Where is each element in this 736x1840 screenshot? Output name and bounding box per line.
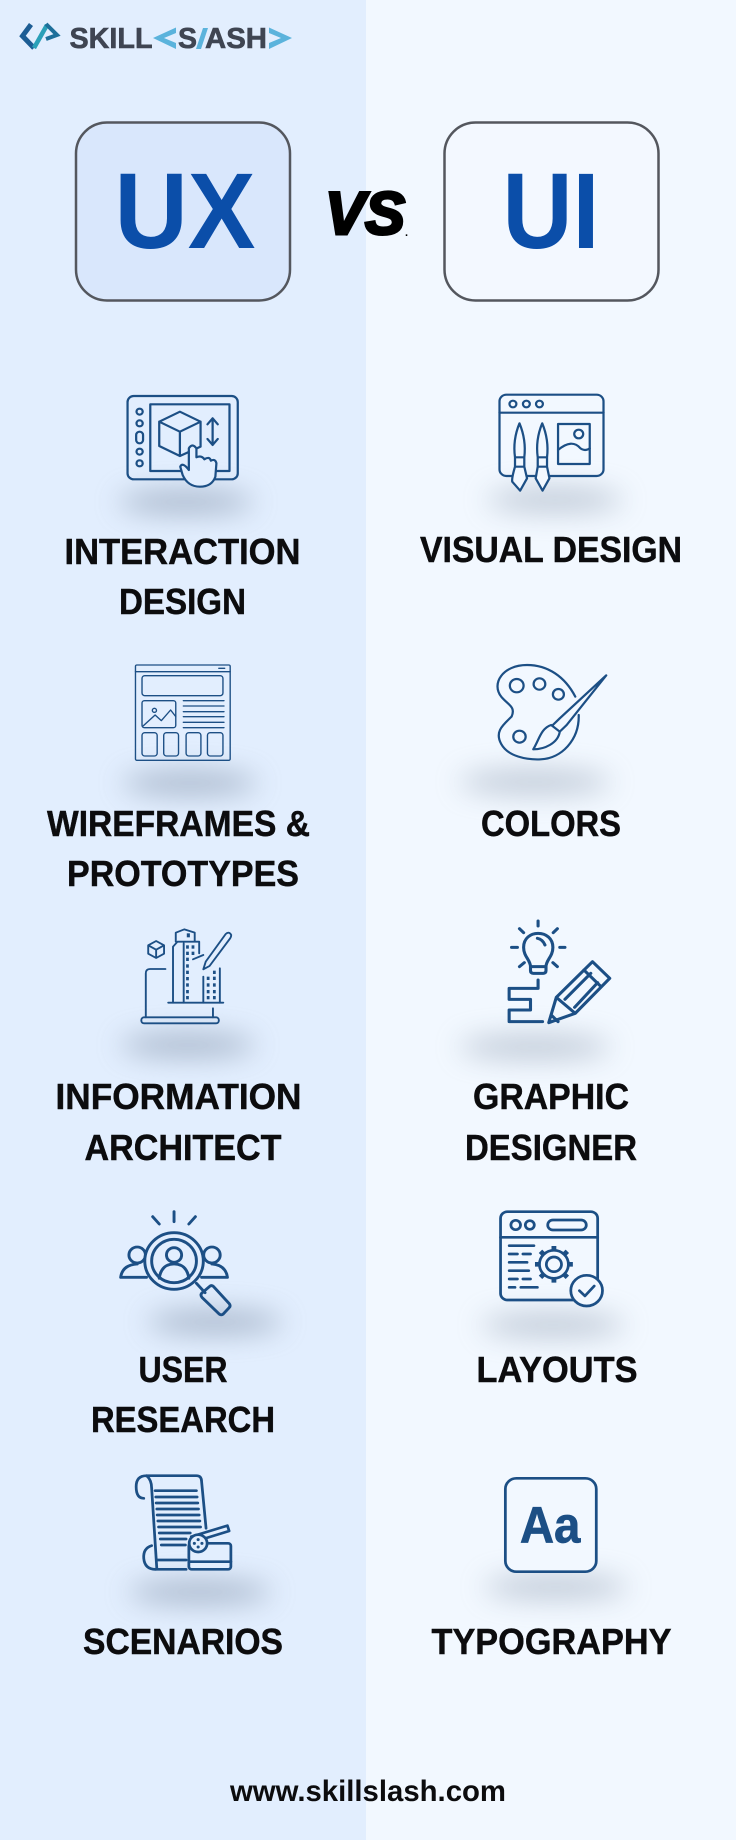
icon: Aa tile	[505, 1478, 596, 1572]
heading: ARCHITECT	[84, 1127, 282, 1168]
versus label: .	[405, 227, 408, 239]
icon: wireframe page	[135, 665, 230, 760]
icon shadow	[487, 489, 623, 511]
icon: browser with gear and check	[501, 1212, 602, 1306]
icon shadow	[481, 1314, 625, 1336]
heading: GRAPHIC	[473, 1076, 629, 1117]
heading: INTERACTION	[64, 531, 300, 572]
panel: left background	[0, 0, 366, 1840]
icon: logo mark	[22, 24, 57, 48]
item: visual design	[420, 395, 682, 570]
UI card	[444, 122, 658, 300]
icon shadow	[122, 772, 258, 794]
logo wordmark: ASH	[205, 23, 267, 55]
UX card: UX	[114, 150, 256, 271]
logo wordmark: SKILL	[70, 23, 152, 55]
item: colors	[459, 665, 621, 844]
item: scenarios	[83, 1476, 283, 1662]
icon shadow	[459, 771, 611, 793]
heading: RESEARCH	[91, 1399, 275, 1440]
UI card: UI	[502, 150, 600, 271]
heading: WIREFRAMES &	[47, 803, 310, 844]
icon: script scroll with film slate	[136, 1476, 231, 1569]
heading: PROTOTYPES	[67, 853, 299, 894]
item: wireframes and prototypes	[47, 665, 310, 894]
item: information architect	[56, 929, 302, 1168]
icon shadow	[118, 491, 254, 513]
heading: TYPOGRAPHY	[432, 1621, 672, 1662]
item: user research	[91, 1212, 283, 1440]
logo wordmark	[70, 23, 292, 55]
icon shadow	[459, 1036, 611, 1058]
heading: INFORMATION	[56, 1076, 302, 1117]
heading: LAYOUTS	[476, 1349, 638, 1390]
item: interaction design	[64, 396, 300, 622]
logo: Skillslash	[22, 23, 292, 55]
heading: COLORS	[481, 803, 621, 844]
footer website: www.skillslash.com	[229, 1775, 506, 1808]
icon shadow	[120, 1034, 256, 1056]
icon shadow	[128, 1581, 272, 1603]
icon: bulb and pencil	[509, 921, 610, 1023]
heading: VISUAL DESIGN	[420, 529, 682, 570]
UX card	[76, 122, 290, 300]
icon shadow	[147, 1311, 283, 1333]
item: typography	[432, 1478, 672, 1662]
heading: DESIGNER	[465, 1127, 637, 1168]
icon: tablet with cube and hand	[128, 396, 238, 487]
icon: browser with brushes and image	[500, 395, 604, 491]
item: graphic designer	[459, 921, 637, 1168]
item: layouts	[476, 1212, 638, 1390]
icon: Aa tile: Aa	[520, 1496, 581, 1553]
icon shadow	[484, 1576, 628, 1598]
heading: DESIGN	[119, 581, 246, 622]
icon: buildings on laptop with pen	[141, 929, 231, 1023]
logo wordmark: S	[178, 23, 197, 55]
heading: SCENARIOS	[83, 1621, 283, 1662]
icon: magnifier with users	[121, 1212, 230, 1315]
heading: USER	[138, 1349, 228, 1390]
icon: palette and brush	[498, 665, 606, 759]
versus label: VS	[325, 180, 405, 247]
